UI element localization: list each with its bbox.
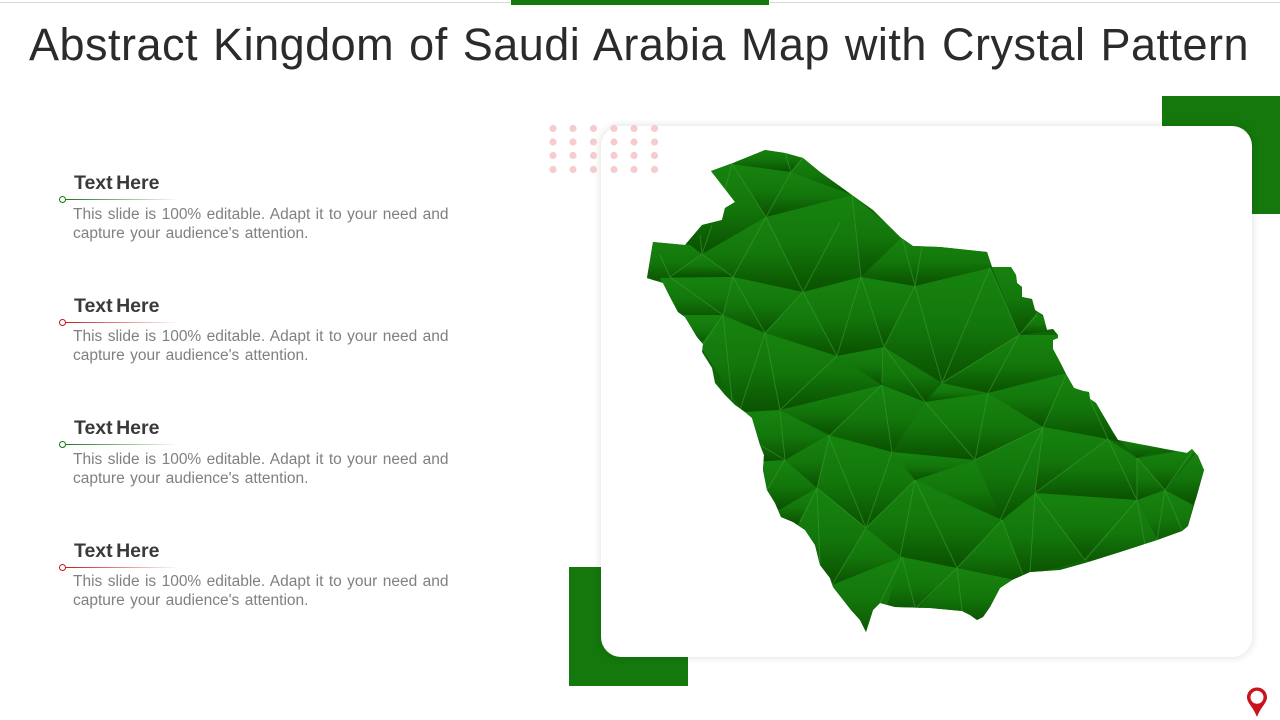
item 4 body: This slide is 100% editable. Adapt it to your need and	[73, 573, 448, 590]
item 3 body: This slide is 100% editable. Adapt it to your need and	[73, 451, 448, 468]
item 3 body: capture your audience's attention.	[73, 470, 308, 487]
item 2 body: capture your audience's attention.	[73, 347, 308, 364]
item 1 body: capture your audience's attention.	[73, 225, 308, 242]
item 2 body: This slide is 100% editable. Adapt it to your need and	[73, 328, 448, 345]
item 1 body: This slide is 100% editable. Adapt it to your need and	[73, 206, 448, 223]
title: Abstract Kingdom of Saudi Arabia Map with Crystal Pattern	[29, 19, 1249, 70]
map: Saudi Arabia crystal pattern	[647, 150, 1204, 632]
icon: location pin	[1247, 688, 1267, 717]
item 3 heading: Text Here	[74, 417, 159, 439]
item 2 marker	[59, 319, 66, 326]
item 3 body	[73, 451, 448, 487]
item 4 marker	[59, 564, 66, 571]
item 1 connector	[62, 199, 180, 200]
accent square: bottom left	[569, 567, 688, 686]
item 3 connector	[62, 444, 180, 445]
item 3	[59, 417, 448, 487]
item 1 marker	[59, 196, 66, 203]
item 1	[59, 172, 448, 242]
facet lines	[660, 153, 1193, 611]
item 4 body: capture your audience's attention.	[73, 592, 308, 609]
accent square: top right	[1162, 96, 1280, 214]
item 4 heading: Text Here	[74, 540, 159, 562]
item 2 body	[73, 328, 448, 364]
item 2 connector	[62, 322, 180, 323]
item 1 body	[73, 206, 448, 242]
item 3 marker	[59, 441, 66, 448]
item 1 heading: Text Here	[74, 172, 159, 194]
item 2	[59, 295, 448, 364]
dot grid	[550, 124, 658, 174]
item 4 connector	[62, 567, 180, 568]
item 4 body	[73, 573, 448, 609]
item 4	[59, 540, 448, 609]
top accent bar	[511, 0, 769, 5]
item 2 heading: Text Here	[74, 295, 159, 317]
map card	[601, 126, 1252, 657]
